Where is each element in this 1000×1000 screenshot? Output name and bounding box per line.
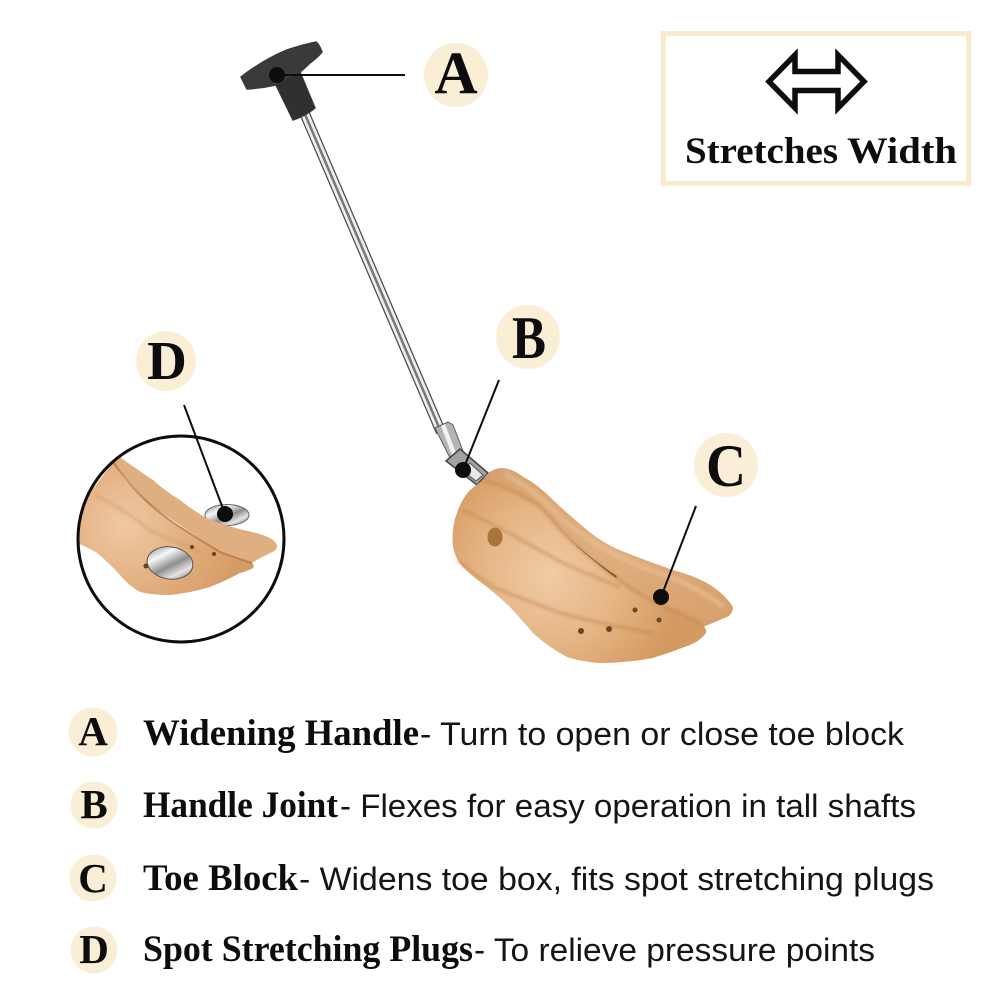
legend row C: C [78,855,108,901]
legend row B [70,781,916,828]
badge B [496,305,560,371]
legend row B: B [80,781,108,827]
icon: double arrow [769,55,864,108]
legend text B: - Flexes for easy operation in tall shafts [340,788,916,824]
detail holes [190,545,194,549]
leader line B [455,380,499,478]
lower wood jaw [70,462,254,595]
front jaw [452,480,706,663]
back plug [205,504,249,526]
legend row D [70,926,875,974]
callout text: Stretches [685,131,838,172]
shaft rod [304,112,488,485]
toe block wood [452,468,733,663]
badge C [694,433,758,499]
badge C: C [706,433,746,499]
legend text D: Spot Stretching Plugs [143,929,473,970]
legend text A: - Turn to open or close toe block [420,716,905,752]
badge D: D [147,330,187,391]
collar [435,422,463,458]
detail grain lower [95,495,200,552]
legend text B: Handle Joint [143,785,339,826]
leader line C [653,506,696,605]
detail grain [113,462,252,563]
detail circle: plugs [70,436,284,642]
legend text C: - Widens toe box, fits spot stretching plugs [299,861,934,897]
badge A [424,40,488,107]
joint [446,449,488,485]
slot shadow [562,538,617,583]
big hole [488,528,502,546]
leader line D [184,405,233,522]
leader line A [269,67,405,83]
badge D [136,330,196,391]
legend text A: Widening Handle [143,713,419,754]
legend row C [70,854,934,902]
callout text: Width [847,131,957,172]
widening handle [241,42,322,120]
legend row D: D [79,926,109,972]
small holes [578,628,584,634]
upper wood jaw [113,457,277,563]
front plug [146,546,194,580]
callout: stretches width [664,34,968,184]
badge A: A [434,40,478,106]
grain lines [457,480,703,633]
back jaw [483,468,733,627]
legend text D: - To relieve pressure points [474,932,875,968]
legend text C: Toe Block [143,858,298,899]
badge B: B [512,305,546,371]
legend row A: A [78,708,108,754]
legend row A [68,708,905,756]
back jaw highlight [505,474,724,607]
